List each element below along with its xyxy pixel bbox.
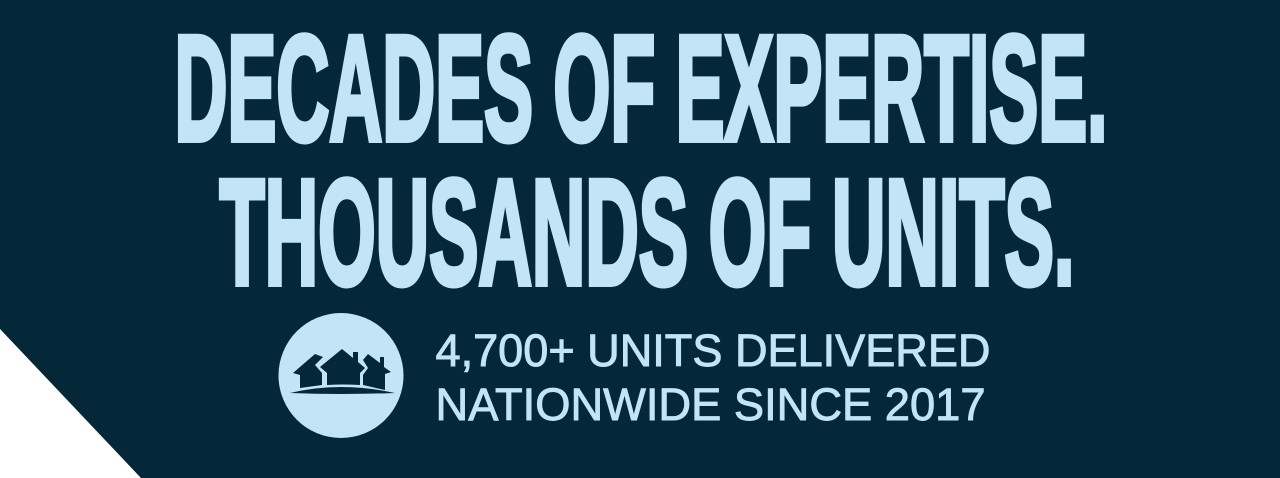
stat line 2: NATIONWIDE SINCE 2017 [436, 379, 986, 430]
ground curve [290, 387, 395, 394]
stat line 1: 4,700+ UNITS DELIVERED [436, 325, 990, 376]
stat text [436, 325, 990, 430]
center house [320, 349, 365, 385]
title [174, 4, 1108, 316]
right house [363, 354, 391, 390]
left house [293, 354, 323, 388]
icon: houses in circle [278, 313, 404, 438]
